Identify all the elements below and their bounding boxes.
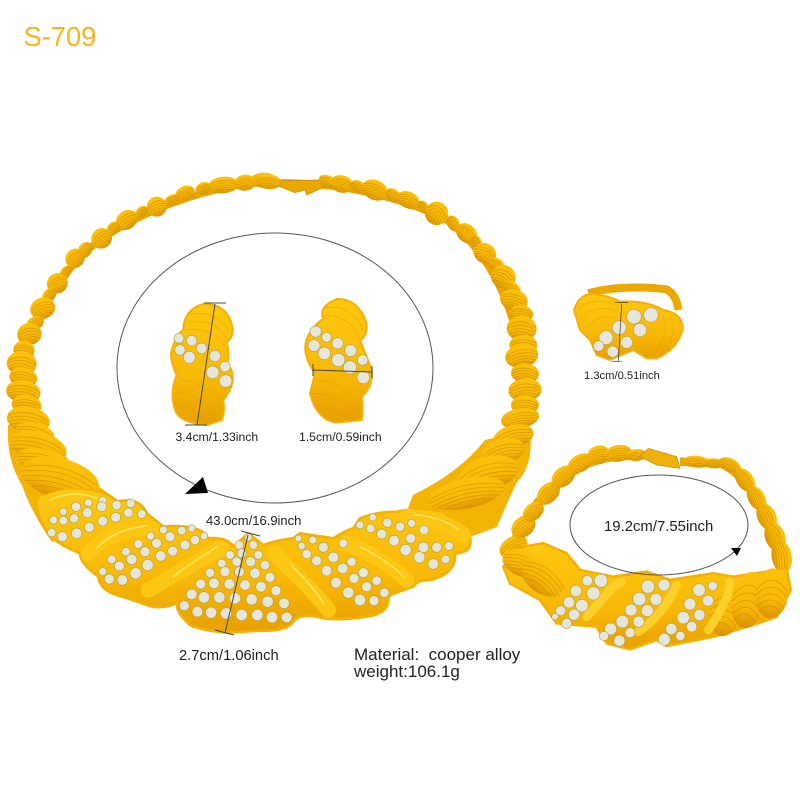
- bracelet: [495, 442, 794, 649]
- bracelet size ellipse: [570, 475, 748, 575]
- necklace chain right: [254, 172, 543, 516]
- label: earring width: 1.5cm/0.59inch: [299, 430, 382, 444]
- necklace shoulders: [8, 425, 531, 542]
- bracelet chain: [513, 455, 637, 547]
- necklace front panels: [37, 489, 471, 633]
- clasp: [280, 180, 325, 195]
- rhinestones: [47, 497, 453, 623]
- material and weight text: weight:106.1g: [353, 662, 460, 681]
- title: product code: S-709: [24, 21, 96, 52]
- ring: [574, 287, 683, 362]
- necklace: [5, 172, 543, 633]
- label: necklace length: 43.0cm/16.9inch: [206, 513, 301, 528]
- label: earring length: 3.4cm/1.33inch: [176, 430, 258, 444]
- earring left: [171, 304, 233, 425]
- label: ring size: 1.3cm/0.51inch: [584, 370, 660, 382]
- ring measure line: [612, 303, 628, 362]
- necklace chain left: [5, 172, 277, 508]
- bracelet clasp: [640, 448, 680, 468]
- bracelet front: [503, 543, 791, 649]
- label: bracelet length: 19.2cm/7.55inch: [604, 519, 713, 535]
- label: pendant height: 2.7cm/1.06inch: [179, 648, 279, 664]
- measure lines: [185, 303, 372, 635]
- earring right: [305, 299, 372, 423]
- arrowhead: [185, 477, 208, 494]
- bracelet arrowhead: [731, 548, 741, 556]
- earring and necklace size circle: [117, 233, 433, 503]
- material and weight text: [353, 645, 521, 681]
- material and weight text: Material: cooper alloy: [354, 645, 521, 664]
- twisted bands: [45, 497, 463, 610]
